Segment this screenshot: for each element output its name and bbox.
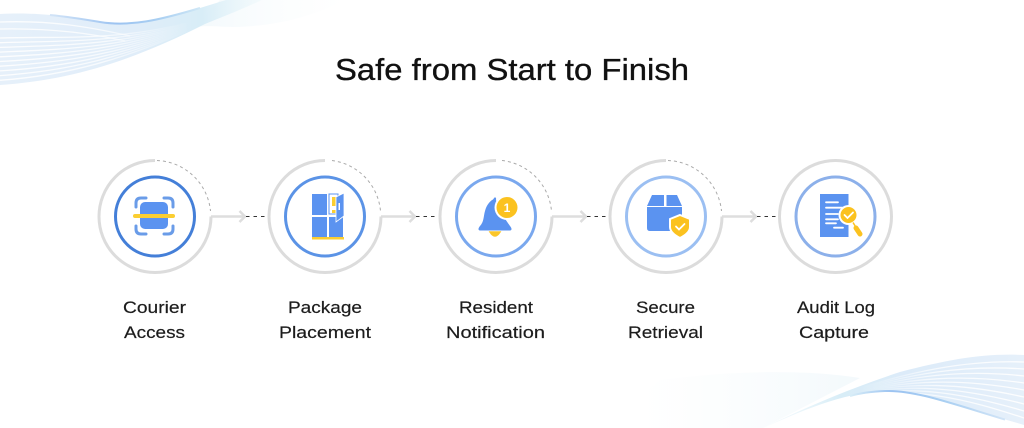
label 4: Secure	[636, 298, 695, 317]
arrow: step 2 to 3	[381, 211, 436, 222]
icon: package with shield	[647, 195, 690, 238]
label 1: Courier	[123, 298, 186, 317]
arrow: step 4 to 5	[722, 211, 777, 222]
label 5	[797, 298, 875, 342]
step 3: resident notification	[440, 160, 552, 342]
inner ring 4	[626, 177, 706, 256]
step 1: courier access	[99, 160, 211, 342]
inner ring 1	[116, 177, 194, 256]
label 2: Placement	[279, 323, 371, 342]
label 1	[123, 298, 186, 342]
inner ring 5	[796, 177, 875, 256]
decorative wave: bottom right	[600, 355, 1024, 428]
label 3: Notification	[446, 323, 545, 342]
outer ring 3	[440, 160, 552, 272]
step 2: package placement	[269, 160, 381, 342]
arrow: step 1 to 2	[211, 211, 266, 222]
icon: audit document	[820, 194, 860, 237]
inner ring 2	[286, 177, 364, 256]
icon: bell: 1	[504, 201, 511, 215]
icon: locker	[312, 193, 344, 240]
label 3: Resident	[459, 298, 533, 317]
decorative wave: top left	[0, 0, 345, 85]
label 5: Audit Log	[797, 298, 875, 317]
label 4	[628, 298, 703, 342]
step 5: audit log capture	[780, 160, 892, 342]
icon: scanner	[133, 198, 175, 234]
label 2: Package	[288, 298, 362, 317]
outer ring 5	[780, 160, 892, 272]
outer ring 1	[99, 160, 211, 272]
icon: bell	[478, 195, 520, 236]
label 2	[279, 298, 371, 342]
outer ring 2	[269, 160, 381, 272]
step 4: secure retrieval	[610, 160, 722, 342]
label 3	[446, 298, 545, 342]
arrow: step 3 to 4	[552, 211, 607, 222]
label 4: Retrieval	[628, 323, 703, 342]
label 5: Capture	[799, 323, 869, 342]
label 1: Access	[124, 323, 185, 342]
inner ring 3	[456, 177, 536, 256]
title: Safe from Start to Finish	[335, 52, 689, 87]
outer ring 4	[610, 160, 722, 272]
